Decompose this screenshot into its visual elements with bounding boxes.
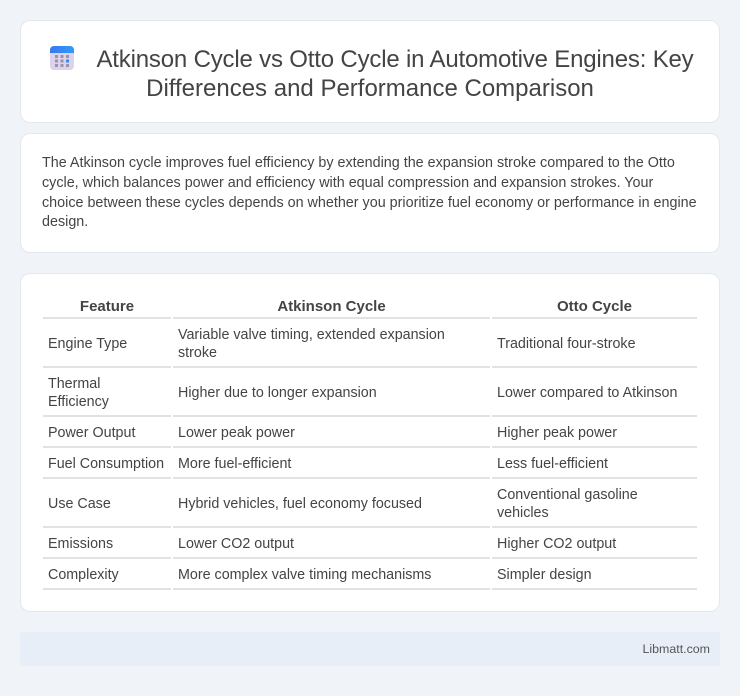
table header [80, 298, 632, 315]
comparison table: vehicles [497, 505, 549, 521]
comparison table: Simpler design [497, 567, 592, 583]
footer text: Libmatt.com [643, 642, 710, 656]
comparison table: Traditional four-stroke [497, 336, 636, 352]
intro text: The Atkinson cycle improves fuel efficiency by extending the expansion stroke compared to the Otto [42, 155, 675, 171]
row: fuel consumption [48, 456, 608, 472]
comparison table: Higher due to longer expansion [178, 385, 377, 401]
comparison table: Thermal [48, 376, 100, 392]
comparison table: Hybrid vehicles, fuel economy focused [178, 496, 422, 512]
comparison table: Use Case [48, 496, 111, 512]
comparison table: Feature [80, 298, 134, 315]
row: complexity [48, 567, 592, 583]
comparison table: Emissions [48, 536, 113, 552]
comparison table: stroke [178, 345, 217, 361]
icon: calendar [50, 46, 74, 70]
footer bar [20, 632, 720, 666]
row: power output [48, 425, 617, 441]
intro panel [20, 133, 720, 253]
intro text: cycle, which balances power and efficiency with equal compression and expansion strokes. Your [42, 175, 653, 191]
header panel [20, 20, 720, 123]
comparison table: Higher CO2 output [497, 536, 616, 552]
row: use case [48, 487, 638, 521]
comparison table: Atkinson Cycle [277, 298, 386, 315]
row: engine type [48, 327, 636, 361]
intro text: design. [42, 214, 88, 230]
comparison table: Engine Type [48, 336, 127, 352]
intro text: choice between these cycles depends on whether you prioritize fuel economy or performance in engine [42, 195, 697, 211]
comparison table: Complexity [48, 567, 119, 583]
comparison table: Otto Cycle [557, 298, 632, 315]
comparison table panel [20, 273, 720, 612]
comparison table: More fuel-efficient [178, 456, 291, 472]
comparison table: More complex valve timing mechanisms [178, 567, 431, 583]
comparison table: Power Output [48, 425, 135, 441]
comparison table: Lower CO2 output [178, 536, 294, 552]
title: Differences and Performance Comparison [146, 75, 594, 102]
comparison table: Higher peak power [497, 425, 617, 441]
comparison table: Lower compared to Atkinson [497, 385, 677, 401]
comparison table: Conventional gasoline [497, 487, 638, 503]
comparison table: Less fuel-efficient [497, 456, 608, 472]
comparison table: Efficiency [48, 394, 109, 410]
title: Atkinson Cycle vs Otto Cycle in Automotive Engines: Key [96, 46, 694, 73]
comparison table: Variable valve timing, extended expansion [178, 327, 445, 343]
intro text [42, 155, 697, 230]
row: emissions [48, 536, 616, 552]
row: thermal efficiency [48, 376, 677, 410]
comparison table: Lower peak power [178, 425, 295, 441]
title [96, 46, 694, 102]
comparison table: Fuel Consumption [48, 456, 164, 472]
